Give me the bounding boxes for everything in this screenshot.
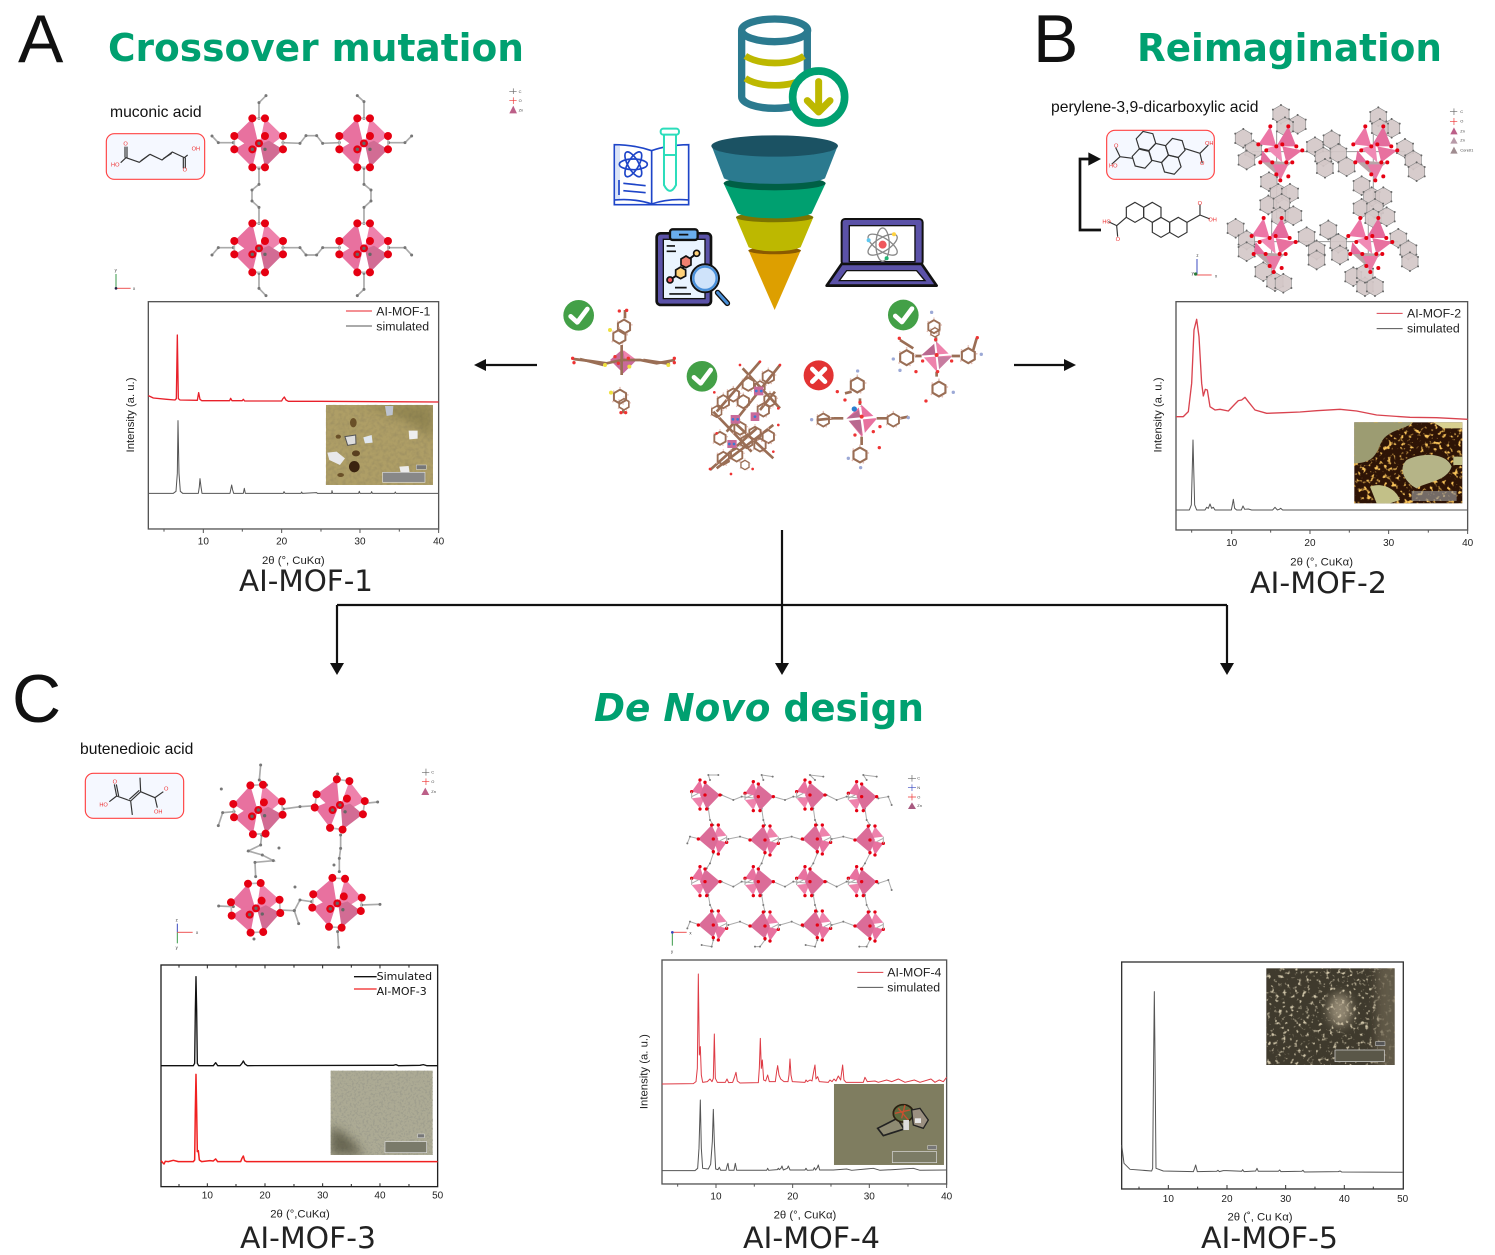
atom legend: AI-MOF-4: O bbox=[917, 794, 920, 799]
arrow: ligand modification bbox=[1080, 152, 1101, 230]
x-axis label: 2θ (°, CuKα) bbox=[774, 1209, 837, 1221]
candidate 1: accepted bbox=[563, 300, 676, 414]
atom legend: AI-MOF-3: O bbox=[431, 779, 434, 784]
chemical structures: perylene dicarboxylic acids: O bbox=[1114, 144, 1119, 150]
x-axis label: 2θ (˚, Cu Kα) bbox=[1227, 1212, 1293, 1224]
atom legend: AI-MOF-2: Zn bbox=[1460, 138, 1465, 143]
chemical structure: muconic acid bbox=[106, 134, 205, 179]
axis triad: AI-MOF-3: x bbox=[196, 930, 199, 935]
axis tick labels: 30 bbox=[864, 1192, 875, 1203]
atom legend: AI-MOF-2: Zn bbox=[1460, 128, 1465, 133]
icon: database download bbox=[742, 19, 845, 123]
inset photo: AI-MOF-5 crystals bbox=[1266, 968, 1395, 1065]
chemical structure: muconic acid: OH bbox=[192, 147, 200, 153]
legend: AI-MOF-4 bbox=[857, 966, 942, 994]
y-axis label: Intensity (a. u.) bbox=[1153, 377, 1165, 452]
axis tick labels: 20 bbox=[259, 1191, 271, 1202]
legend: AI-MOF-4: AI-MOF-4 bbox=[887, 966, 942, 980]
icon: science book and test tube bbox=[614, 129, 689, 205]
icon: funnel bbox=[711, 135, 838, 310]
axis tick labels: 10 bbox=[198, 536, 209, 547]
compound name: AI-MOF-1: AI-MOF-1 bbox=[239, 564, 373, 598]
axis tick labels: 50 bbox=[1397, 1194, 1409, 1205]
axis tick labels: 40 bbox=[433, 536, 445, 547]
atom legend: AI-MOF-1 bbox=[509, 88, 523, 113]
arrow: to crossover mutation bbox=[474, 359, 537, 371]
chemical structures: perylene dicarboxylic acids: O bbox=[1200, 161, 1205, 167]
panel letter A: A bbox=[18, 1, 64, 77]
compound name: AI-MOF-3: AI-MOF-3 bbox=[240, 1221, 376, 1255]
axis tick labels: 40 bbox=[941, 1192, 953, 1203]
label: muconic acid: muconic acid bbox=[110, 104, 202, 121]
chemical structure: butenedioic acid: O bbox=[113, 780, 118, 786]
axis triad: AI-MOF-1 bbox=[115, 268, 136, 291]
arrow: to reimagination bbox=[1014, 359, 1076, 371]
axis triad: AI-MOF-4: x bbox=[689, 930, 692, 935]
inset photo: AI-MOF-4 crystals bbox=[834, 1084, 944, 1165]
legend: AI-MOF-4: simulated bbox=[887, 980, 940, 994]
chart: AI-MOF-4 PXRD bbox=[638, 960, 953, 1221]
atom legend: AI-MOF-1: O bbox=[519, 98, 522, 103]
axis tick labels: 20 bbox=[1221, 1194, 1233, 1205]
x-axis label: 2θ (°,CuKα) bbox=[270, 1209, 330, 1221]
crystal structure: AI-MOF-3 bbox=[218, 765, 380, 947]
axis tick labels: 50 bbox=[432, 1191, 444, 1202]
candidate 3: rejected bbox=[804, 360, 910, 469]
chemical structures: perylene dicarboxylic acids: O bbox=[1198, 201, 1203, 207]
heading: Reimagination: Reimagination bbox=[1137, 26, 1442, 70]
atom legend: AI-MOF-2: C bbox=[1460, 109, 1463, 114]
atom legend: AI-MOF-2: O bbox=[1460, 119, 1463, 124]
chart: AI-MOF-1 PXRD bbox=[125, 302, 445, 567]
chemical structure: butenedioic acid: HO bbox=[99, 803, 108, 809]
icon: clipboard with magnifier bbox=[657, 229, 727, 305]
candidate structures bbox=[563, 300, 983, 475]
axis tick labels bbox=[198, 536, 445, 547]
axis tick labels: 40 bbox=[1339, 1194, 1350, 1205]
legend: AI-MOF-1 bbox=[346, 304, 431, 334]
atom legend: AI-MOF-1: C bbox=[519, 89, 522, 94]
axis tick labels: 10 bbox=[202, 1191, 213, 1202]
compound name: AI-MOF-2: AI-MOF-2 bbox=[1250, 566, 1387, 600]
legend: AI-MOF-2: AI-MOF-2 bbox=[1407, 306, 1461, 320]
series: AI-MOF-3 measured bbox=[161, 1074, 438, 1164]
axis tick labels bbox=[1226, 538, 1474, 549]
central group: database and funnel screening bbox=[614, 19, 937, 310]
label: butenedioic acid: butenedioic acid bbox=[80, 741, 193, 758]
chemical structures: perylene dicarboxylic acids: OH bbox=[1205, 141, 1213, 147]
crystal structure: AI-MOF-2 bbox=[1228, 105, 1425, 296]
axis tick labels: 30 bbox=[1280, 1194, 1292, 1205]
crystal structure: AI-MOF-1 bbox=[212, 96, 412, 296]
axis tick labels: 10 bbox=[1163, 1194, 1174, 1205]
atom legend: AI-MOF-3 bbox=[421, 769, 436, 795]
heading: Crossover mutation: Crossover mutation bbox=[108, 26, 524, 70]
legend: AI-MOF-2 bbox=[1377, 306, 1461, 336]
inset photo: AI-MOF-1 crystals bbox=[326, 405, 433, 485]
atom legend: AI-MOF-3: Zn bbox=[431, 789, 436, 794]
axis tick labels bbox=[202, 1191, 444, 1202]
axis tick labels: 30 bbox=[354, 536, 366, 547]
crystal structure: AI-MOF-4 bbox=[687, 775, 892, 947]
label: perylene-3,9-dicarboxylic acid: perylene-3,9-dicarboxylic acid bbox=[1051, 99, 1259, 116]
axis triad: AI-MOF-3: z bbox=[176, 918, 178, 923]
chemical structures: perylene dicarboxylic acids bbox=[1080, 129, 1217, 243]
legend: AI-MOF-1: AI-MOF-1 bbox=[376, 304, 431, 318]
axis triad: AI-MOF-2: x bbox=[1215, 274, 1218, 279]
y-axis label: Intensity (a. u.) bbox=[638, 1034, 650, 1109]
chemical structure: butenedioic acid: O bbox=[164, 787, 169, 793]
atom legend: AI-MOF-2 bbox=[1450, 108, 1474, 154]
atom legend: AI-MOF-4 bbox=[908, 775, 922, 809]
heading: De Novo design: De Novo design bbox=[594, 686, 924, 730]
series: AI-MOF-2 simulated bbox=[1176, 440, 1468, 510]
inset photo: AI-MOF-3 crystals bbox=[331, 1071, 433, 1155]
chart: AI-MOF-5 PXRD bbox=[1122, 962, 1409, 1224]
compound name: AI-MOF-5: AI-MOF-5 bbox=[1201, 1221, 1338, 1255]
atom legend: AI-MOF-3: C bbox=[431, 770, 434, 775]
axis triad: AI-MOF-1: x bbox=[133, 286, 136, 291]
legend: AI-MOF-3: AI-MOF-3 bbox=[377, 985, 427, 998]
axis tick labels: 40 bbox=[374, 1191, 386, 1202]
chemical structure: muconic acid: O bbox=[123, 142, 128, 148]
legend: AI-MOF-3 bbox=[354, 970, 432, 998]
axis tick labels bbox=[1163, 1194, 1409, 1205]
axis tick labels: 30 bbox=[1383, 538, 1395, 549]
atom legend: AI-MOF-4: N bbox=[917, 785, 920, 790]
legend: AI-MOF-2: simulated bbox=[1407, 322, 1460, 336]
axis tick labels: 30 bbox=[317, 1191, 329, 1202]
axis tick labels: 10 bbox=[710, 1192, 722, 1203]
series: AI-MOF-2 measured bbox=[1176, 319, 1468, 419]
axis triad: AI-MOF-1: y bbox=[115, 268, 118, 273]
axis triad: AI-MOF-2: y bbox=[1192, 270, 1195, 275]
axis tick labels: 20 bbox=[1304, 538, 1316, 549]
chart: AI-MOF-2 PXRD bbox=[1153, 302, 1474, 568]
series: AI-MOF-5 pattern bbox=[1122, 992, 1403, 1172]
arrows: to de novo design bbox=[330, 530, 1234, 675]
series: AI-MOF-4 measured bbox=[662, 974, 947, 1084]
atom legend: AI-MOF-1: Zn bbox=[519, 107, 523, 112]
series: AI-MOF-4 simulated bbox=[662, 1100, 947, 1171]
chemical structure: butenedioic acid: OH bbox=[154, 810, 162, 816]
panel letter C: C bbox=[12, 661, 61, 737]
axis triad: AI-MOF-3: y bbox=[176, 945, 179, 950]
chemical structures: perylene dicarboxylic acids: HO bbox=[1109, 164, 1118, 170]
axis tick labels: 20 bbox=[276, 536, 288, 547]
chemical structure: butenedioic acid bbox=[85, 773, 184, 818]
candidate 4: accepted bbox=[888, 300, 983, 403]
axis tick labels bbox=[710, 1192, 953, 1203]
series: AI-MOF-3 simulated bbox=[161, 977, 438, 1066]
chemical structures: perylene dicarboxylic acids: O bbox=[1116, 237, 1121, 243]
legend: AI-MOF-3: Simulated bbox=[377, 970, 432, 983]
chemical structures: perylene dicarboxylic acids: HO bbox=[1102, 220, 1111, 226]
chart: AI-MOF-3 PXRD bbox=[161, 965, 444, 1221]
legend: AI-MOF-1: simulated bbox=[376, 320, 429, 334]
axis triad: AI-MOF-2 bbox=[1192, 253, 1218, 279]
chemical structures: perylene dicarboxylic acids: OH bbox=[1208, 218, 1217, 224]
axis triad: AI-MOF-3 bbox=[176, 918, 199, 950]
axis triad: AI-MOF-4: y bbox=[671, 949, 674, 954]
axis tick labels: 10 bbox=[1226, 538, 1238, 549]
atom legend: AI-MOF-4: Zn bbox=[917, 803, 922, 808]
panel letter B: B bbox=[1033, 1, 1078, 77]
axis tick labels: 40 bbox=[1462, 538, 1474, 549]
x-axis label: 2θ (°, CuKα) bbox=[1290, 556, 1353, 568]
chemical structure: muconic acid: HO bbox=[111, 162, 120, 168]
axis triad: AI-MOF-2: z bbox=[1196, 253, 1198, 258]
icon: laptop with atom bbox=[827, 219, 937, 286]
series: AI-MOF-1 simulated bbox=[148, 421, 439, 493]
atom legend: AI-MOF-4: C bbox=[917, 776, 920, 781]
axis triad: AI-MOF-4 bbox=[671, 930, 692, 954]
series: AI-MOF-1 measured bbox=[148, 335, 439, 402]
atom legend: AI-MOF-2: Core01 bbox=[1460, 148, 1474, 153]
candidate 2: accepted bbox=[687, 360, 781, 475]
inset photo: AI-MOF-2 crystals bbox=[1354, 422, 1462, 503]
axis tick labels: 20 bbox=[787, 1192, 799, 1203]
chemical structure: muconic acid: O bbox=[183, 167, 188, 173]
compound name: AI-MOF-4: AI-MOF-4 bbox=[743, 1221, 880, 1255]
x-axis label: 2θ (°, CuKα) bbox=[262, 555, 325, 567]
y-axis label: Intensity (a. u.) bbox=[125, 377, 137, 452]
